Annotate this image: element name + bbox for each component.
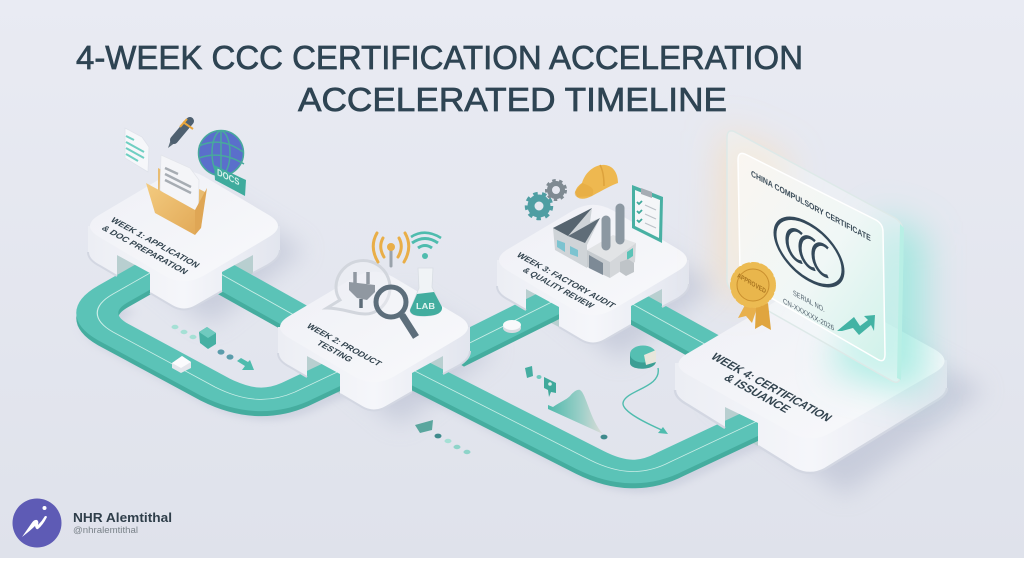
serial number: CN-XXXXXX-2026: [783, 296, 834, 333]
title: [76, 40, 803, 119]
panel: week 4 platform: [675, 287, 947, 473]
white puck on track: [503, 320, 521, 333]
panel: week 2 platform: [278, 272, 470, 410]
icon: approved seal: [733, 265, 773, 330]
ground icons: segment three: [415, 366, 556, 454]
icon: pen: [168, 119, 193, 148]
certificate heading: CHINA COMPULSORY CERTIFICATE: [751, 168, 871, 243]
label: week 3: WEEK 3: FACTORY AUDIT: [514, 251, 617, 310]
icon: approved seal: APPROVED: [737, 272, 767, 296]
icon: DOCS tag: [214, 165, 246, 196]
serial number: SERIAL NO.: [793, 288, 825, 314]
belt shadows: [103, 304, 776, 482]
panel: week 1 platform: [88, 171, 280, 310]
icon: folder with document: [146, 155, 207, 235]
timeline track: [97, 268, 770, 477]
panel: week 3 platform: [497, 205, 689, 344]
curved arrow to week 4: [623, 368, 668, 434]
icon: small document: [125, 128, 149, 172]
pie chart icon: [630, 346, 656, 369]
label: week 4: WEEK 4: CERTIFICATION: [708, 351, 835, 424]
icon: hard hat: [575, 165, 618, 199]
icon: DOCS tag: DOCS: [217, 167, 240, 189]
icon: antenna signal: [373, 233, 409, 266]
icon: globe: [198, 130, 244, 176]
icon: factory: [553, 208, 636, 278]
track side faces: [97, 273, 770, 477]
brand handle: @nhralemtithal: [73, 525, 138, 536]
certificate glow: [718, 130, 925, 395]
icon: plug in speech bubble: [327, 261, 390, 314]
icon: magnifier: [376, 287, 416, 337]
growth arrow: [837, 315, 875, 335]
icon: gears: [526, 180, 566, 218]
ground icons: segment one: [172, 325, 254, 370]
white box on track: [172, 356, 191, 373]
track top faces: [97, 268, 770, 472]
label: week 2: WEEK 2: PRODUCT: [304, 322, 384, 368]
label: week 4: & ISSUANCE: [721, 372, 793, 415]
label: week 3: & QUALITY REVIEW: [520, 266, 597, 311]
icon: lab flask: [410, 268, 442, 316]
label: week 1: WEEK 1: APPLICATION: [108, 216, 202, 270]
icon: wifi: [411, 233, 441, 259]
title: ACCELERATED TIMELINE: [298, 82, 727, 119]
mini chart on ground: [548, 390, 608, 439]
track centre lines: [97, 268, 770, 472]
platform shadows: [120, 195, 985, 495]
tunnel openings: [117, 255, 758, 446]
icon: clipboard: [632, 185, 663, 243]
panel: glass certificate: [727, 131, 904, 382]
label: week 1: & DOC PREPARATION: [99, 224, 190, 276]
logo mark: [12, 498, 62, 548]
title: 4-WEEK CCC CERTIFICATION ACCELERATION: [76, 40, 803, 77]
brand name: NHR Alemtithal: [73, 511, 172, 525]
label: week 2: TESTING: [314, 339, 355, 364]
icon: lab flask: LAB: [416, 301, 435, 311]
CCC mark: [775, 205, 843, 299]
